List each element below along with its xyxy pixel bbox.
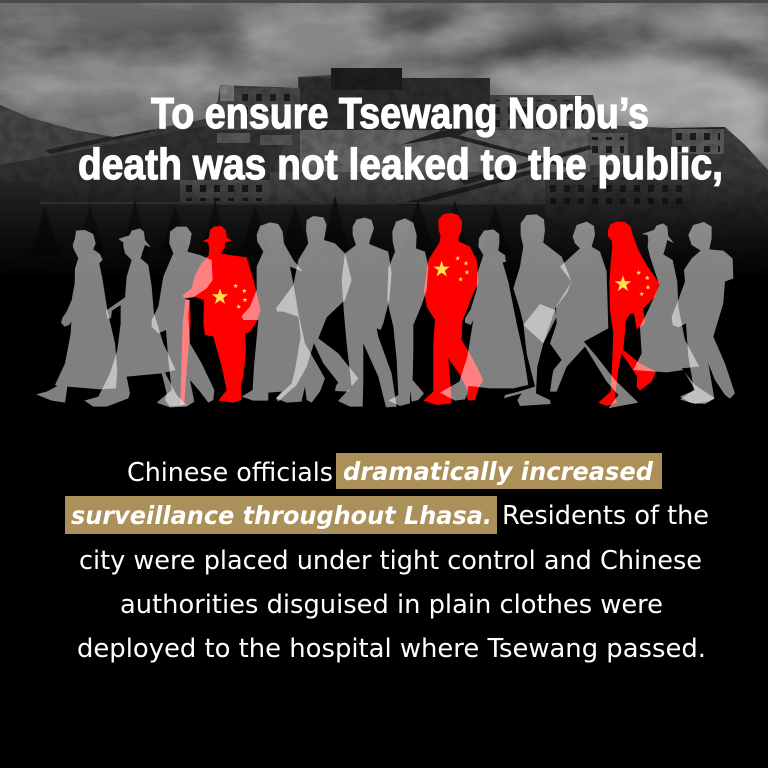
grey figure 3: woman with cane arm [152, 227, 214, 407]
body text: surveillance throughout Lhasa. [71, 501, 492, 530]
background photo: Potala Palace under clouds [0, 0, 768, 260]
grey figure 6: man walking [338, 218, 397, 407]
grey figures: Tibetan residents [36, 214, 735, 408]
grey figure 2: hat and robe [84, 228, 187, 407]
body text [65, 453, 709, 664]
title: To ensure Tsewang Norbu’s [151, 89, 649, 138]
body text: deployed to the hospital where Tsewang passed. [77, 634, 706, 664]
grey figure 7: woman in jacket [387, 218, 428, 406]
red figures: Chinese officials [180, 213, 659, 406]
grey figure 1: robed woman [36, 230, 117, 403]
perimeter wall [0, 205, 545, 224]
east wing [588, 133, 628, 165]
lower left wing buildings [217, 133, 250, 143]
flag stars [212, 283, 248, 309]
stairways [45, 130, 592, 205]
lower buildings [550, 172, 590, 178]
white palace walls [300, 130, 590, 172]
grey figure 11: hat and robe [633, 223, 715, 404]
hillside [0, 75, 768, 260]
red figure walking [423, 213, 483, 405]
palace and hill [0, 68, 768, 260]
cloudy sky [0, 0, 768, 240]
flag stars [433, 256, 470, 281]
folder held by man [523, 304, 555, 343]
gold highlight bars [65, 453, 662, 534]
crowd of silhouettes [36, 213, 735, 408]
grey figure 5: man striding [276, 216, 358, 402]
dark fade [0, 0, 768, 290]
body text: city were placed under tight control and Chinese [79, 546, 702, 576]
grey figure 9: man with folder [504, 214, 572, 406]
body text: dramatically increased [343, 457, 654, 486]
flag stars [615, 270, 651, 296]
grey figure 10: man striding wide [550, 222, 638, 408]
red palace [299, 78, 490, 130]
body text: Chinese officials [127, 458, 333, 488]
red figure long hair [598, 222, 659, 406]
body text: Residents of the [502, 501, 709, 531]
body text: authorities disguised in plain clothes were [120, 590, 663, 620]
grey figure 4: long-haired woman [242, 222, 325, 403]
red figure with hat and cane [180, 226, 261, 406]
grey figure 8: robed woman [440, 229, 528, 401]
tree line [30, 195, 510, 255]
grey figure 12: man in t-shirt [672, 222, 735, 404]
title [78, 89, 723, 189]
